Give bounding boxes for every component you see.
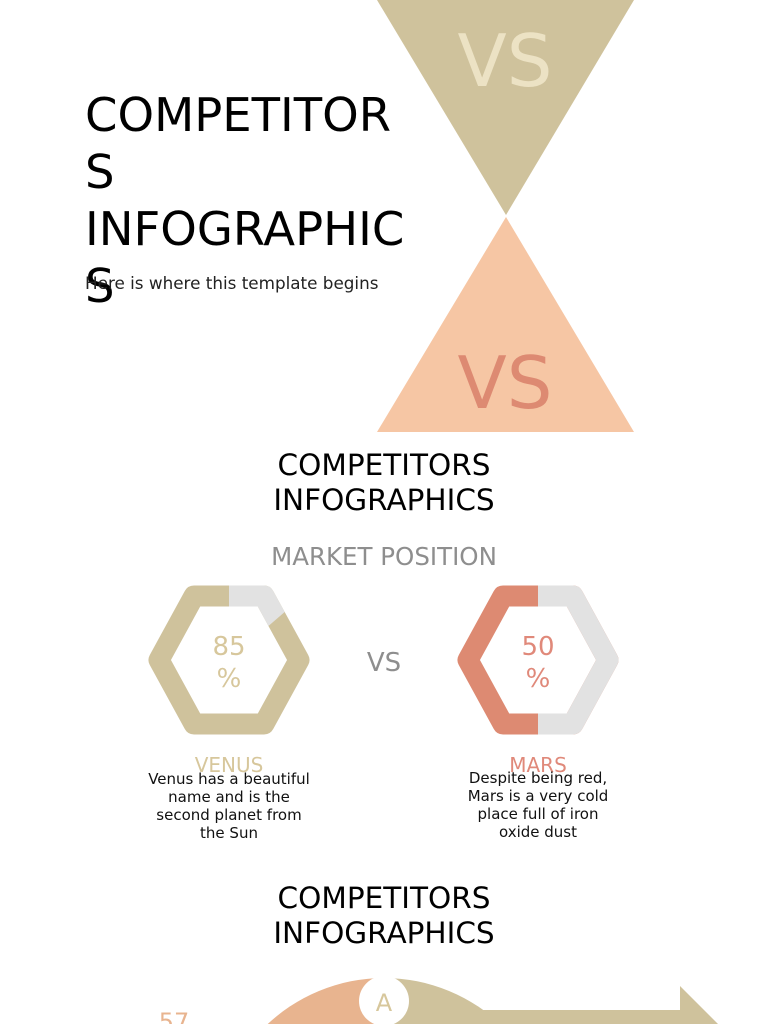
top triangle <box>377 0 634 215</box>
market position: MARKET POSITION <box>271 542 497 571</box>
hexagon: venus 85%: 85 <box>212 632 246 662</box>
venus text: the Sun <box>200 824 258 842</box>
venus text <box>148 770 310 842</box>
hexagon: mars 50% <box>468 596 608 724</box>
mars text: oxide dust <box>499 823 577 841</box>
title: COMPETITOR <box>85 88 391 142</box>
venus text: Venus has a beautiful <box>148 770 310 788</box>
section heading 1 <box>273 448 495 517</box>
hexagon: venus 85%: % <box>217 664 241 694</box>
venus text: name and is the <box>168 788 290 806</box>
section heading 2: COMPETITORS <box>278 881 490 915</box>
mars text <box>468 769 608 841</box>
venus text: second planet from <box>156 806 302 824</box>
mars text: Mars is a very cold <box>468 787 608 805</box>
hexagon: mars 50%: 50 <box>521 632 555 662</box>
hexagon: venus 85% <box>159 596 299 724</box>
venus label: VENUS <box>195 753 263 777</box>
mars text: Despite being red, <box>469 769 607 787</box>
bottom diagram: A <box>376 989 393 1017</box>
top triangle: VS <box>458 19 552 103</box>
title: INFOGRAPHIC <box>85 202 404 256</box>
section heading 1: COMPETITORS <box>278 448 490 482</box>
bottom diagram <box>159 976 718 1024</box>
mars text: place full of iron <box>478 805 598 823</box>
bottom triangle <box>377 217 634 432</box>
triangles graphic <box>148 0 718 1024</box>
section heading 2: INFOGRAPHICS <box>273 916 495 950</box>
section heading 1: INFOGRAPHICS <box>273 483 495 517</box>
bottom triangle: VS <box>458 341 552 425</box>
subtitle: Here is where this template begins <box>85 273 378 293</box>
mars label: MARS <box>509 753 567 777</box>
vs label: VS <box>367 648 401 678</box>
title: S <box>85 259 115 313</box>
hexagon: mars 50%: % <box>526 664 550 694</box>
title: S <box>85 145 115 199</box>
section heading 2 <box>273 881 495 950</box>
title <box>85 88 404 313</box>
